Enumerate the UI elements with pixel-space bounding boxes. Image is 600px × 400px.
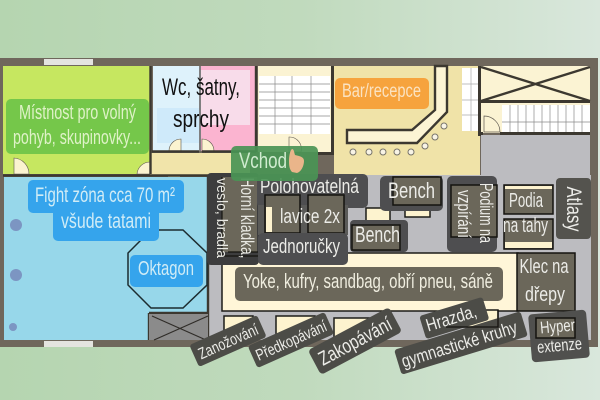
label: fight zone: [28, 180, 184, 241]
label: toilets: [162, 74, 240, 133]
label: weightlifting platform: vzpírání: [454, 190, 474, 238]
label: yoke and strongman: [235, 267, 503, 301]
label: squat rack: [517, 253, 575, 311]
label: back extensions: Hyper: [539, 316, 576, 338]
label: platform for pulls: na tahy: [503, 215, 548, 237]
text: rowing and bars: veslo, bradla: [213, 178, 230, 259]
pillars: [9, 219, 22, 331]
label: dumbbells: [258, 233, 348, 265]
label: toilets: Wc, šatny,: [162, 74, 240, 101]
floor plan building shell: [0, 58, 598, 347]
label: bench top: [380, 176, 443, 211]
label: front raises: Předkopávání: [253, 318, 330, 365]
label: back kicks: Zakopávání: [315, 313, 396, 370]
label: bar: [335, 78, 429, 109]
small cream equipment boxes: [224, 205, 498, 340]
text: upper pulley: Horní kladka,: [237, 178, 257, 258]
label: free movement room: pohyb, skupinovky...: [13, 127, 141, 149]
stair room: [258, 66, 334, 155]
label: bench lower: [350, 220, 408, 252]
label: back extensions: extenze: [536, 334, 583, 357]
label: squat rack: Klec na: [520, 256, 569, 278]
octagon ring: [128, 230, 207, 308]
room: free movement: [3, 66, 150, 174]
label: bar and gymnastic rings: [394, 297, 528, 375]
label: bar and gymnastic rings: gymnastické kruhy: [399, 317, 520, 371]
label: free movement room: Místnost pro volný: [19, 102, 136, 124]
room: toilets and showers: [153, 66, 255, 151]
bar counter: [347, 66, 447, 143]
label: weightlifting platform: Podium na: [476, 183, 496, 244]
room divider walls: [3, 66, 256, 340]
label: fight zone: všude tatami: [61, 210, 151, 233]
label: octagon: Oktagon: [138, 258, 194, 280]
label: bench top: Bench: [388, 178, 435, 203]
label: platforms: [504, 185, 553, 214]
storage with cross: [478, 66, 590, 136]
label: bar: Bar/recepce: [342, 81, 421, 102]
bar area: [334, 66, 480, 175]
label: bench lower: Bench: [355, 222, 400, 247]
label: hip extensions: Zanožování: [196, 321, 262, 363]
corridor: [14, 139, 250, 183]
fight zone floor: [4, 177, 208, 340]
label: weightlifting platform: [447, 176, 497, 252]
icon: pointing hand: [289, 149, 304, 173]
label: toilets: sprchy: [173, 106, 229, 133]
bar stools: [350, 123, 447, 155]
long free weights area: [222, 253, 518, 311]
label: adjustable benches: Polohovatelná: [260, 176, 360, 198]
label: dumbbells: Jednoručky: [263, 236, 340, 258]
label: back extensions: [528, 310, 590, 362]
label: squat rack: dřepy: [525, 284, 565, 306]
label: octagon: [130, 255, 203, 287]
entrance label: Vchod: [239, 148, 287, 173]
left machines block: [207, 173, 259, 265]
label: fight zone: Fight zóna cca 70 m²: [35, 184, 175, 207]
label: yoke and strongman: Yoke, kufry, sandbag, obří pneu, sáně: [243, 271, 493, 293]
back stairs: [479, 103, 590, 135]
label: adjustable benches: [257, 174, 368, 235]
entrance label: [231, 146, 318, 181]
label: platforms: Podia: [509, 190, 544, 212]
label: free movement room: [6, 99, 149, 154]
label: bar and gymnastic rings: Hrazda,: [423, 301, 479, 335]
floor storage box: [149, 314, 208, 340]
label: atlas stones: [556, 178, 591, 239]
label: back kicks: [308, 307, 402, 375]
label: atlas stones: Atlasy: [562, 186, 585, 232]
label: platform for pulls: [503, 215, 553, 249]
label: adjustable benches: lavice 2x: [280, 206, 340, 228]
shelf: [462, 68, 478, 131]
